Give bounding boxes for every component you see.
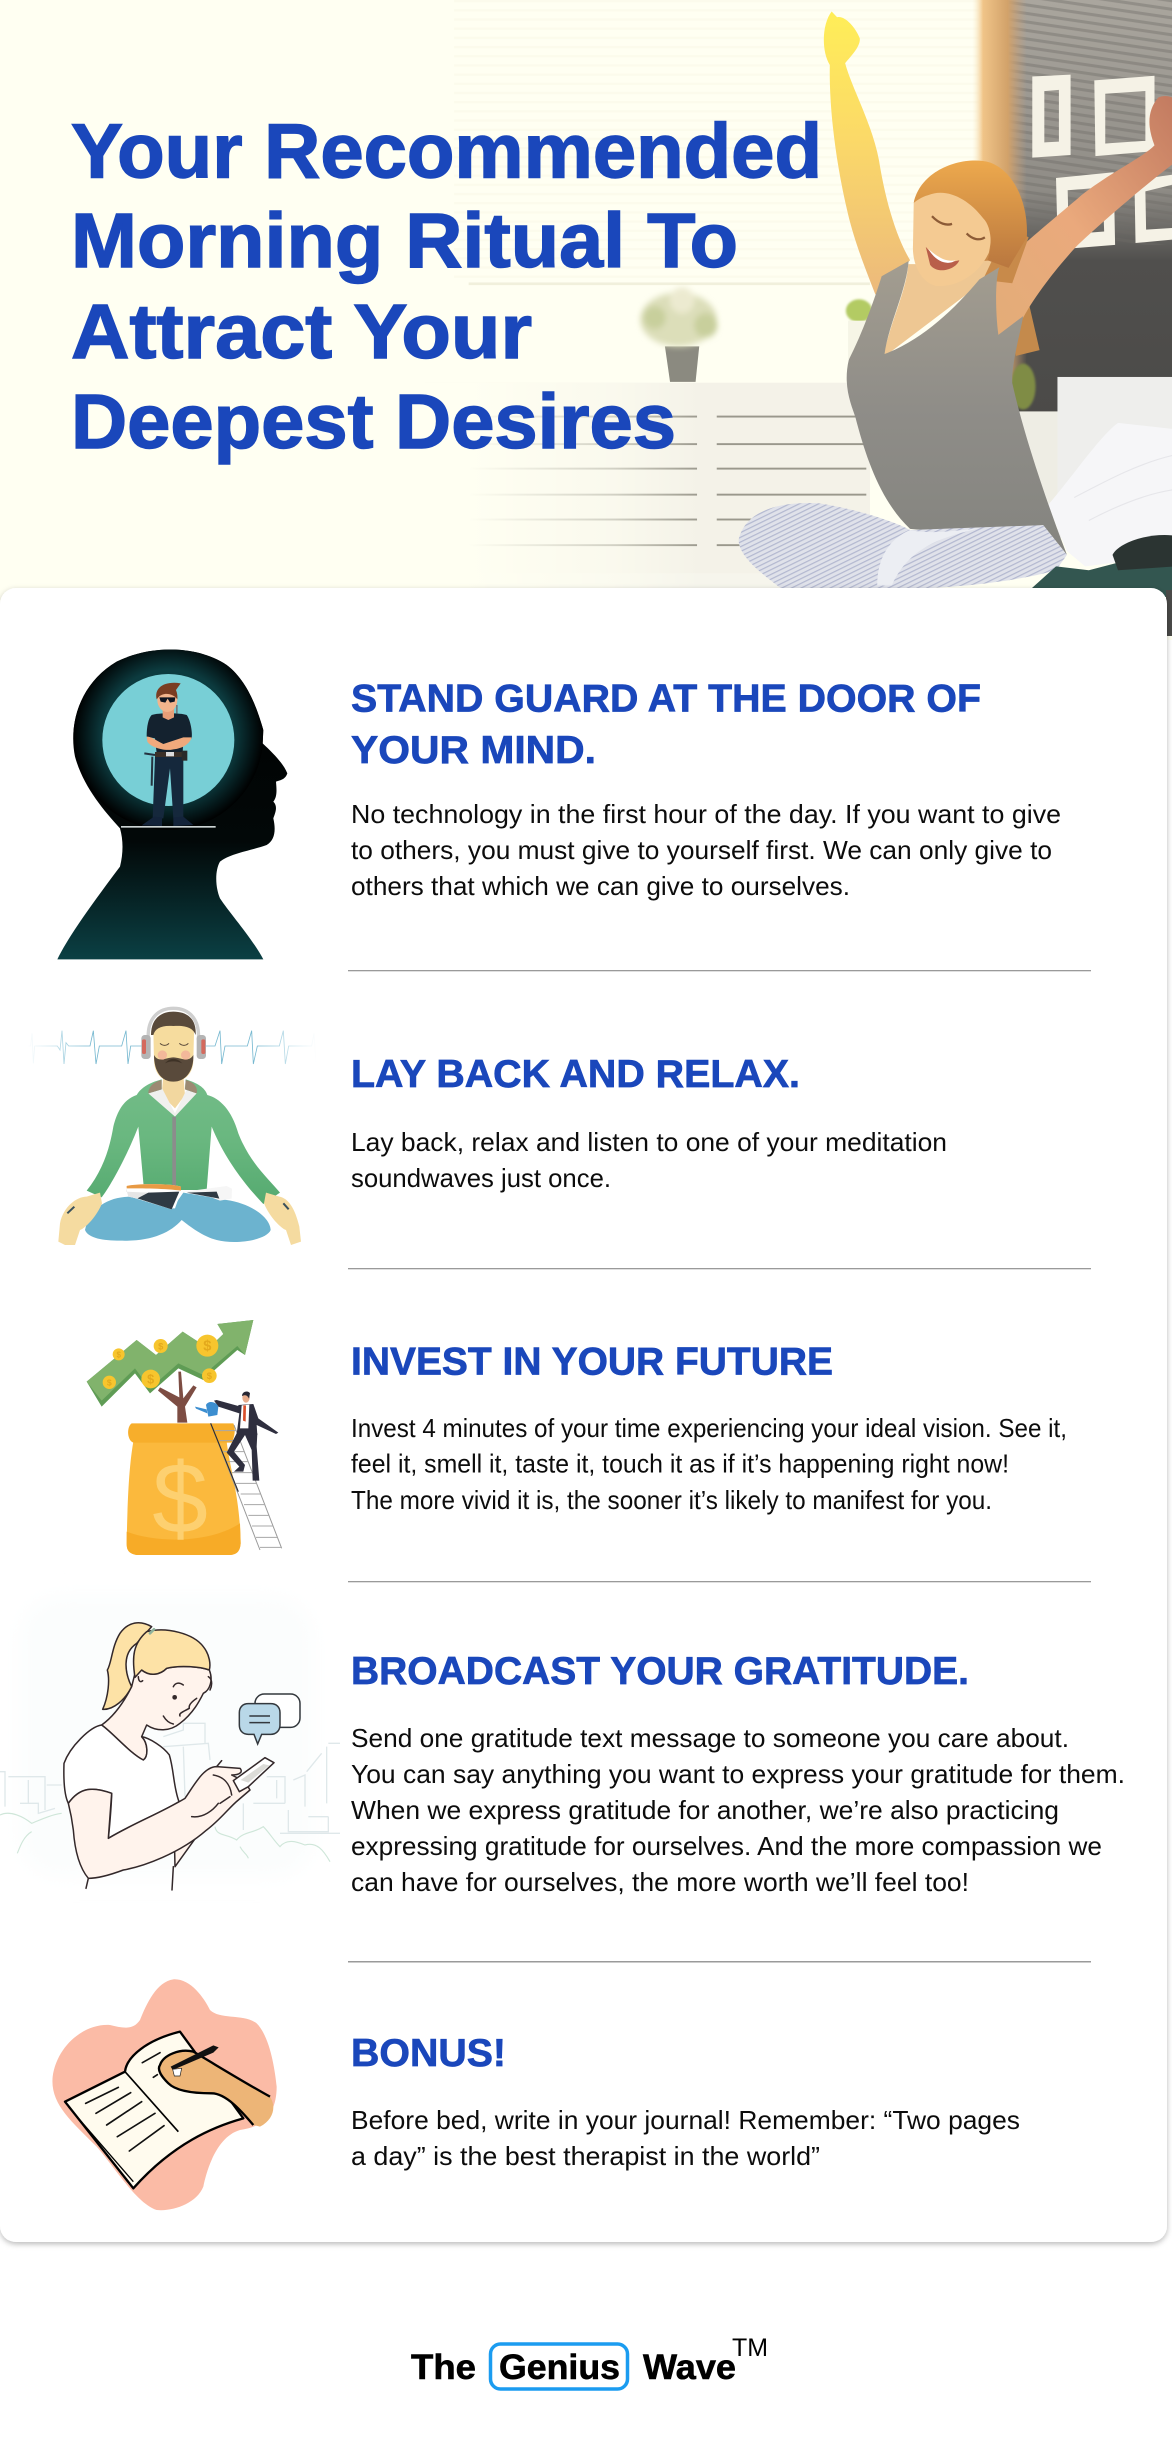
- icon: woman texting gratitude: [0, 1597, 340, 1890]
- icon: money bag tree: $: [107, 1377, 112, 1387]
- logo: The Genius Wave: The: [411, 2348, 476, 2387]
- text: lay back body: Lay back, relax and listen to one of your meditation: [351, 1127, 947, 1157]
- title: Your Recommended: [71, 108, 822, 194]
- title: Attract Your: [71, 289, 532, 375]
- logo: The Genius Wave: TM: [732, 2334, 768, 2362]
- heading: stand guard: STAND GUARD AT THE DOOR OF: [351, 678, 981, 720]
- logo: The Genius Wave: Wave: [643, 2348, 736, 2387]
- text: bonus body: a day” is the best therapist in the world”: [351, 2141, 820, 2171]
- heading: invest: INVEST IN YOUR FUTURE: [351, 1340, 833, 1384]
- icon: money bag tree: $: [147, 1372, 154, 1386]
- logo: The Genius Wave: Genius: [499, 2348, 620, 2387]
- text: broadcast body: expressing gratitude for ourselves. And the more compassion we: [351, 1831, 1102, 1861]
- text: broadcast body: [351, 1723, 1125, 1897]
- text: invest body: [351, 1413, 1067, 1515]
- text: invest body: Invest 4 minutes of your time experiencing your ideal vision. See it,: [351, 1413, 1067, 1443]
- text: bonus body: [351, 2105, 1020, 2171]
- wall: [972, 0, 1172, 421]
- title: [71, 108, 822, 465]
- bed headboard, side table and pillow: [1009, 364, 1172, 566]
- heading: bonus: BONUS!: [351, 2032, 506, 2075]
- heading: stand guard: YOUR MIND.: [351, 729, 596, 772]
- window plant: [640, 287, 874, 382]
- text: stand guard body: [351, 799, 1061, 901]
- bedding: [1030, 535, 1172, 597]
- icon: money bag tree: $: [158, 1341, 164, 1351]
- text: lay back body: soundwaves just once.: [351, 1163, 611, 1193]
- icon: journal and writing hand: [52, 1979, 277, 2210]
- icon: guard inside head: [57, 640, 287, 959]
- heading: lay back: LAY BACK AND RELAX.: [351, 1053, 800, 1096]
- text: bonus body: Before bed, write in your journal! Remember: “Two pages: [351, 2105, 1020, 2135]
- text: broadcast body: When we express gratitude for another, we’re also practicing: [351, 1795, 1059, 1825]
- heading: stand guard: [351, 678, 981, 772]
- panel: hero photo: [0, 0, 1172, 640]
- text: broadcast body: You can say anything you want to express your gratitude for them.: [351, 1759, 1125, 1789]
- icon: money bag tree: $: [207, 1371, 213, 1381]
- picture frames: [1032, 75, 1172, 250]
- heading: broadcast: BROADCAST YOUR GRATITUDE.: [351, 1650, 969, 1693]
- logo: The Genius Wave: [411, 2334, 768, 2389]
- text: stand guard body: others that which we can give to ourselves.: [351, 871, 850, 901]
- woman stretching: [739, 11, 1172, 589]
- radiator: [494, 383, 870, 588]
- icon: money bag tree: $: [203, 1339, 211, 1355]
- text: broadcast body: can have for ourselves, the more worth we’ll feel too!: [351, 1867, 969, 1897]
- panel: steps card: [0, 588, 1167, 2242]
- text: stand guard body: No technology in the first hour of the day. If you want to give: [351, 799, 1061, 829]
- icon: money bag tree: [87, 1320, 282, 1555]
- text: broadcast body: Send one gratitude text message to someone you care about.: [351, 1723, 1069, 1753]
- icon: meditating man with soundwaves: [28, 1008, 316, 1245]
- icon: money bag tree: $: [116, 1350, 121, 1359]
- strip of photo behind card edge: [1166, 590, 1172, 636]
- text: invest body: The more vivid it is, the sooner it’s likely to manifest for you.: [351, 1485, 992, 1515]
- title: Morning Ritual To: [71, 198, 738, 284]
- title: Deepest Desires: [71, 379, 676, 465]
- icon: money bag tree: $: [152, 1443, 208, 1555]
- text: stand guard body: to others, you must give to yourself first. We can only give to: [351, 835, 1052, 865]
- text: invest body: feel it, smell it, taste it, touch it as if it’s happening right now!: [351, 1448, 1009, 1478]
- text: lay back body: [351, 1127, 947, 1193]
- dividers: [348, 970, 1091, 1962]
